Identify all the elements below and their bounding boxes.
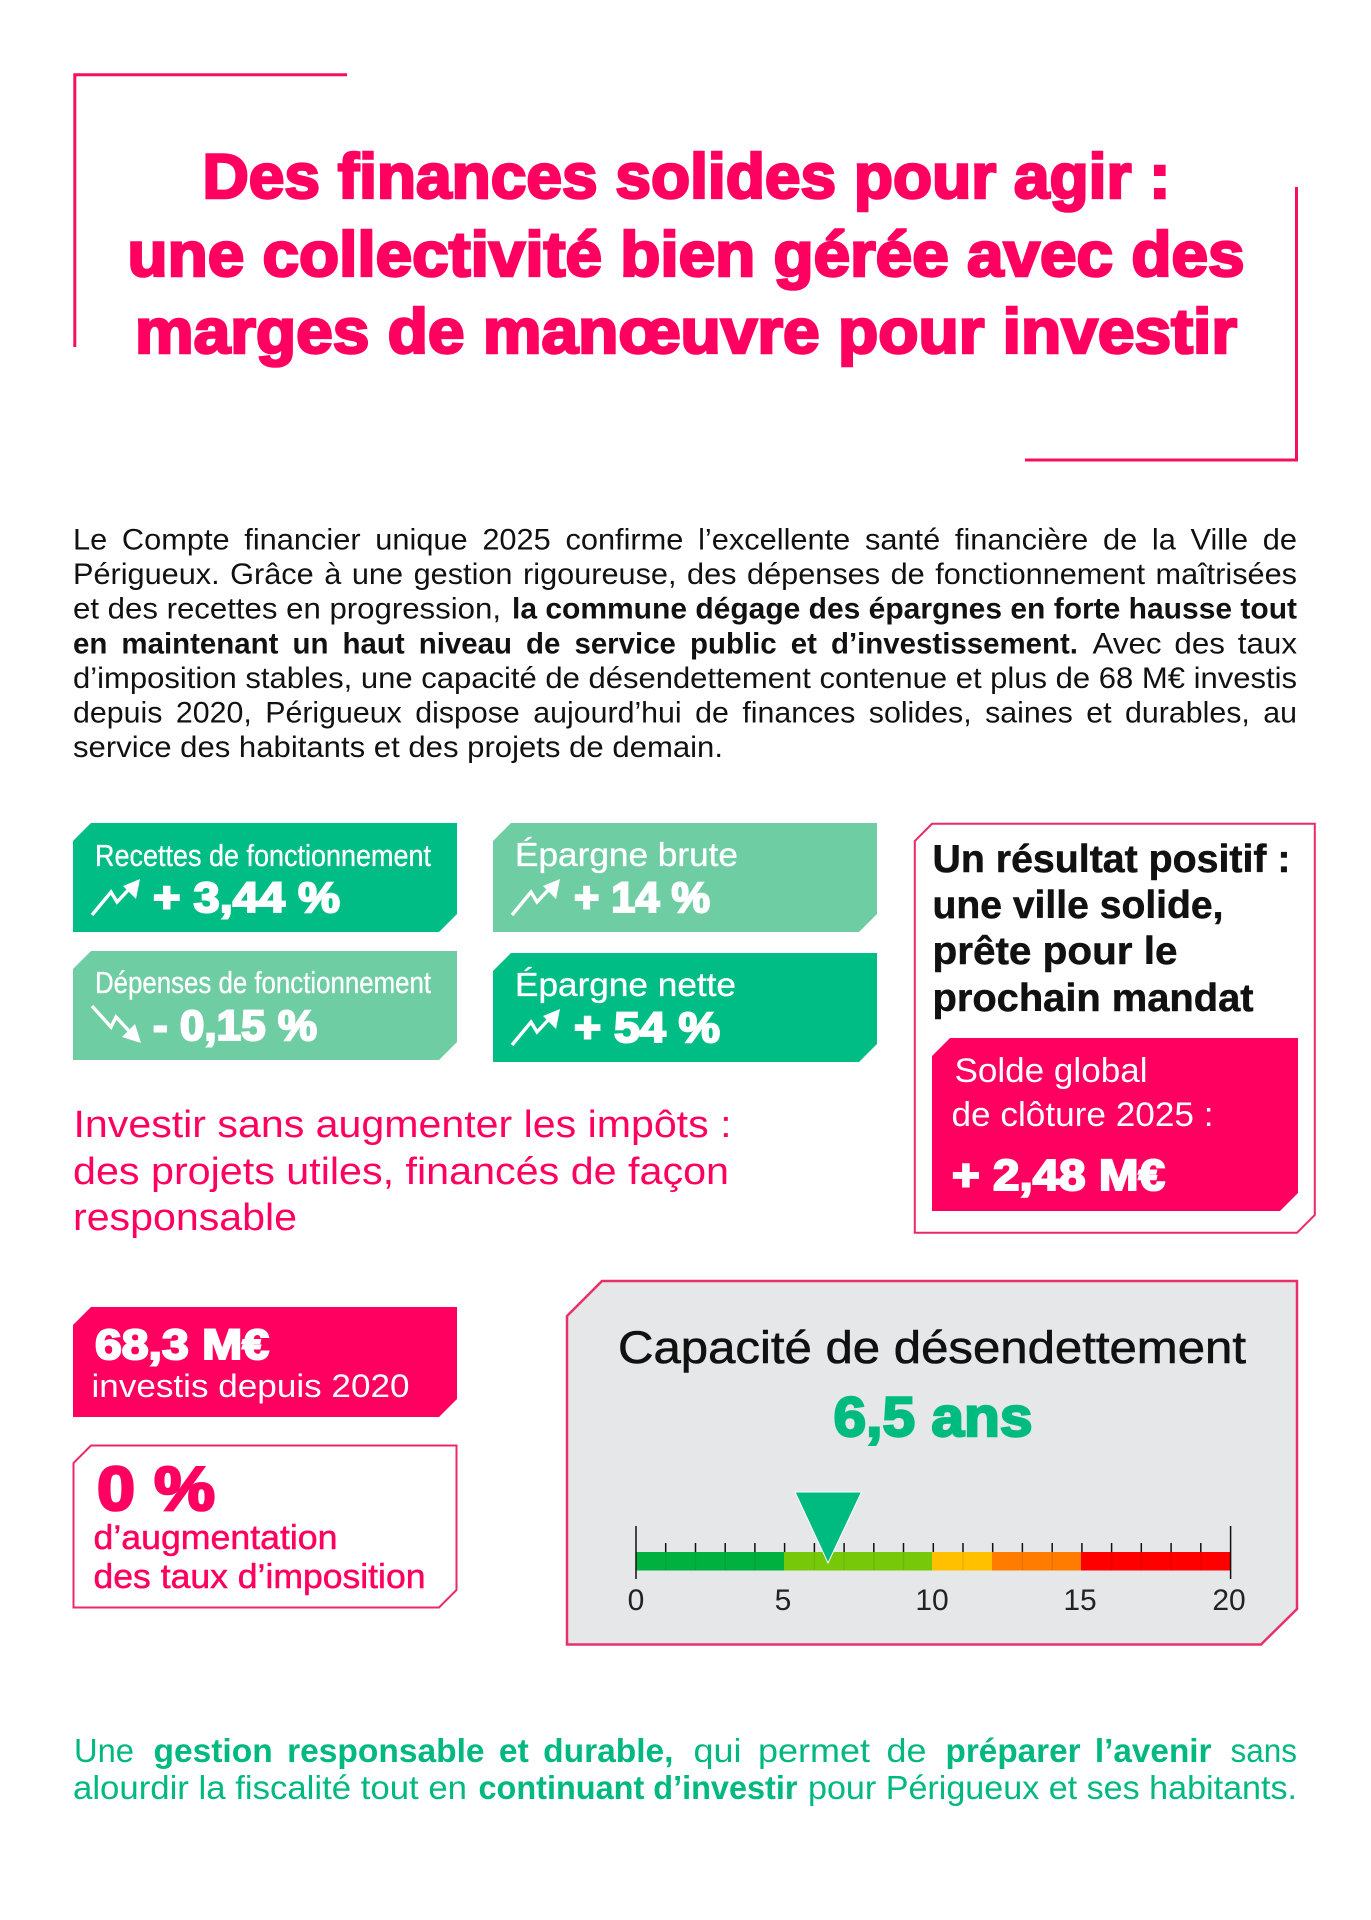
stat card: 0 % d'augmentation: des taux d’imposition	[94, 1558, 426, 1596]
callout: solde global: Solde global	[954, 1052, 1148, 1090]
intro paragraph: la commune dégage des épargnes en forte hausse tout	[512, 593, 1297, 626]
stat card: épargne brute: Épargne brute	[515, 836, 738, 873]
intro paragraph: et des recettes en progression,	[73, 593, 501, 626]
stat card: 68,3 M€ investis: investis depuis 2020	[92, 1368, 410, 1404]
stat card: dépenses de fonctionnement	[73, 951, 457, 1060]
callout: solde global: + 2,48 M€	[952, 1151, 1165, 1200]
scale labels: 15	[1063, 1584, 1097, 1617]
intro paragraph: service des habitants et des projets de demain.	[73, 731, 723, 764]
intro paragraph: Avec des taux	[1092, 627, 1297, 660]
stat card: recettes de fonctionnement: + 3,44 %	[153, 874, 340, 922]
heading: investir sans augmenter les impôts: responsable	[73, 1197, 297, 1239]
callout: solde global: de clôture 2025 :	[952, 1096, 1214, 1134]
bottom-right bracket	[1025, 187, 1296, 460]
icon: falling arrow	[92, 1006, 141, 1043]
title panel with corner brackets	[75, 75, 1296, 460]
stat card: épargne brute	[493, 823, 877, 932]
panel: capacité de désendettement	[567, 1281, 1297, 1644]
coloured bar	[636, 1552, 1231, 1570]
heading: investir sans augmenter les impôts	[73, 1104, 732, 1239]
stat card: épargne nette: + 54 %	[574, 1004, 720, 1052]
stat card: dépenses de fonctionnement: - 0,15 %	[153, 1002, 317, 1050]
marker triangle	[795, 1492, 862, 1563]
closing statement: préparer l’avenir	[946, 1732, 1212, 1769]
callout: solde global	[932, 1038, 1298, 1211]
heading: résultat positif: prochain mandat	[932, 977, 1254, 1020]
stat card: 68,3 M€ investis: 68,3 M€	[95, 1321, 269, 1369]
stat card: dépenses de fonctionnement: Dépenses de fonctionnement	[95, 965, 431, 1000]
heading: investir sans augmenter les impôts: des projets utiles, financés de façon	[73, 1151, 729, 1193]
heading: résultat positif: prête pour le	[932, 930, 1178, 973]
scale labels: 10	[915, 1584, 949, 1617]
closing statement: Une	[74, 1732, 134, 1769]
closing statement	[73, 1732, 1297, 1806]
stat card: épargne nette	[493, 953, 877, 1062]
heading: résultat positif	[932, 838, 1290, 1020]
closing statement: gestion responsable et durable,	[154, 1732, 674, 1769]
title: une collectivité bien gérée avec des	[128, 220, 1244, 290]
title: marges de manœuvre pour investir	[135, 297, 1237, 367]
intro paragraph: depuis 2020, Périgueux dispose aujourd’hui de finances solides, saines et durables, au	[73, 697, 1297, 730]
scale labels: 0	[628, 1584, 644, 1617]
scale labels: 5	[775, 1584, 791, 1617]
panel: résultat positif	[915, 824, 1315, 1233]
stat card: recettes de fonctionnement	[73, 823, 457, 932]
stat card: 0 % d'augmentation: 0 %	[97, 1455, 215, 1524]
value: 6,5 ans: 6,5 ans	[834, 1385, 1032, 1448]
closing statement: qui permet de	[694, 1732, 926, 1769]
scale labels	[628, 1584, 1246, 1617]
intro paragraph	[73, 523, 1297, 764]
closing statement: alourdir la fiscalité tout en	[73, 1769, 467, 1806]
closing statement: sans	[1230, 1732, 1297, 1769]
stat card: recettes de fonctionnement: Recettes de fonctionnement	[95, 838, 431, 873]
heading: investir sans augmenter les impôts: Investir sans augmenter les impôts :	[74, 1104, 732, 1146]
heading: résultat positif: une ville solide,	[932, 884, 1224, 927]
intro paragraph: d’imposition stables, une capacité de désendettement contenue et plus de 68 M€ investis	[73, 662, 1297, 695]
intro paragraph: Le Compte financier unique 2025 confirme l’excellente santé financière de la Ville de	[73, 523, 1297, 556]
heading: résultat positif: Un résultat positif :	[932, 838, 1290, 881]
heading: capacité de désendettement: Capacité de désendettement	[618, 1322, 1247, 1373]
scale labels: 20	[1212, 1584, 1246, 1617]
icon: rising arrow	[512, 1009, 560, 1045]
intro paragraph: en maintenant un haut niveau de service public et d’investissement.	[73, 627, 1078, 660]
icon: rising arrow	[92, 879, 140, 915]
stat card: 68,3 M€ investis	[73, 1307, 457, 1417]
closing statement: pour Périgueux et ses habitants.	[808, 1769, 1297, 1806]
stat card: 0 % d'augmentation	[74, 1446, 456, 1608]
title	[128, 142, 1244, 367]
icon: rising arrow	[512, 879, 560, 915]
closing statement: continuant d’investir	[478, 1769, 798, 1806]
stat card: épargne brute: + 14 %	[574, 874, 710, 922]
stat card: 0 % d'augmentation: d’augmentation	[94, 1519, 338, 1557]
title: Des finances solides pour agir :	[202, 142, 1170, 212]
gauge scale	[628, 1492, 1246, 1617]
intro paragraph: Périgueux. Grâce à une gestion rigoureuse, des dépenses de fonctionnement maîtrisées	[73, 558, 1297, 591]
stat card: épargne nette: Épargne nette	[515, 966, 736, 1003]
top-left bracket	[75, 75, 347, 347]
